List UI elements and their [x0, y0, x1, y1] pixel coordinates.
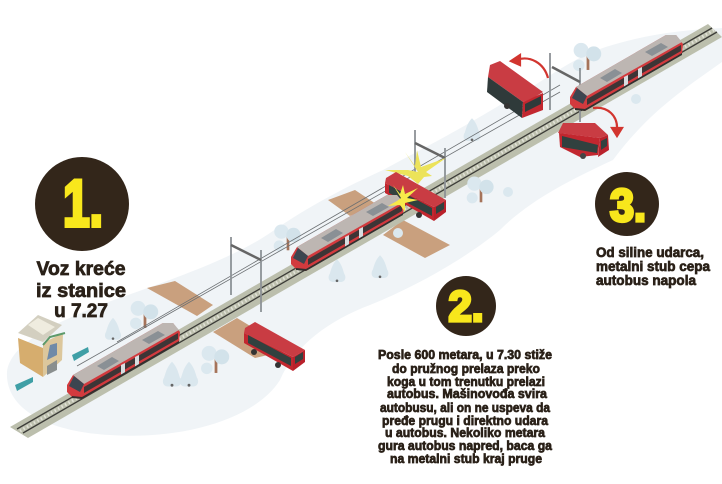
text step 2: na metalni stub kraj pruge — [390, 452, 542, 466]
text step 2 — [378, 348, 553, 466]
text step 2: koga u tom trenutku prelazi — [387, 375, 545, 389]
badge 1 — [35, 157, 129, 251]
overturned bus — [487, 61, 543, 118]
badge 1: 1. — [63, 166, 103, 240]
station building — [18, 315, 65, 377]
bench 1 — [72, 347, 89, 361]
train 1 — [67, 323, 180, 399]
text step 3: metalni stub cepa — [596, 259, 710, 274]
text step 2: u autobus. Nekoliko metara — [385, 426, 546, 440]
badge 3: 3. — [610, 180, 646, 231]
badge 2: 2. — [448, 283, 484, 331]
text step 1 — [36, 259, 126, 322]
text step 1: iz stanice — [36, 281, 126, 302]
train 3 — [570, 35, 683, 111]
bus on road — [244, 322, 305, 371]
badge 2 — [436, 276, 496, 336]
text step 2: gura autobus napred, baca ga — [378, 439, 553, 453]
text step 2: autobusu, ali on ne uspeva da — [380, 401, 551, 415]
text step 2: pređe prugu i direktno udara — [382, 414, 549, 428]
text step 3: autobus napola — [596, 273, 696, 288]
road crossing 2 — [328, 190, 450, 258]
text step 3: Od siline udarca, — [596, 245, 704, 260]
text step 1: u 7.27 — [54, 301, 108, 322]
half bus — [558, 123, 609, 159]
catenary wires — [77, 85, 560, 366]
arrow: bus flies off — [511, 55, 548, 78]
badge 3 — [595, 172, 659, 236]
bench 2 — [15, 377, 33, 391]
bus in crash — [385, 172, 446, 221]
explosion front — [388, 185, 418, 212]
train 2 — [291, 195, 404, 271]
text step 2: Posle 600 metara, u 7.30 stiže — [378, 348, 552, 362]
text step 3 — [596, 245, 710, 288]
round trees and pines — [105, 43, 641, 387]
catenary poles — [231, 53, 580, 312]
road crossing 1 — [147, 281, 290, 358]
text step 2: autobus. Mašinovođa svira — [387, 387, 548, 401]
explosion back — [385, 150, 446, 184]
text step 2: do pružnog prelaza preko — [392, 362, 540, 376]
text step 1: Voz kreće — [36, 259, 126, 280]
arrow: bus half falls — [593, 108, 622, 136]
